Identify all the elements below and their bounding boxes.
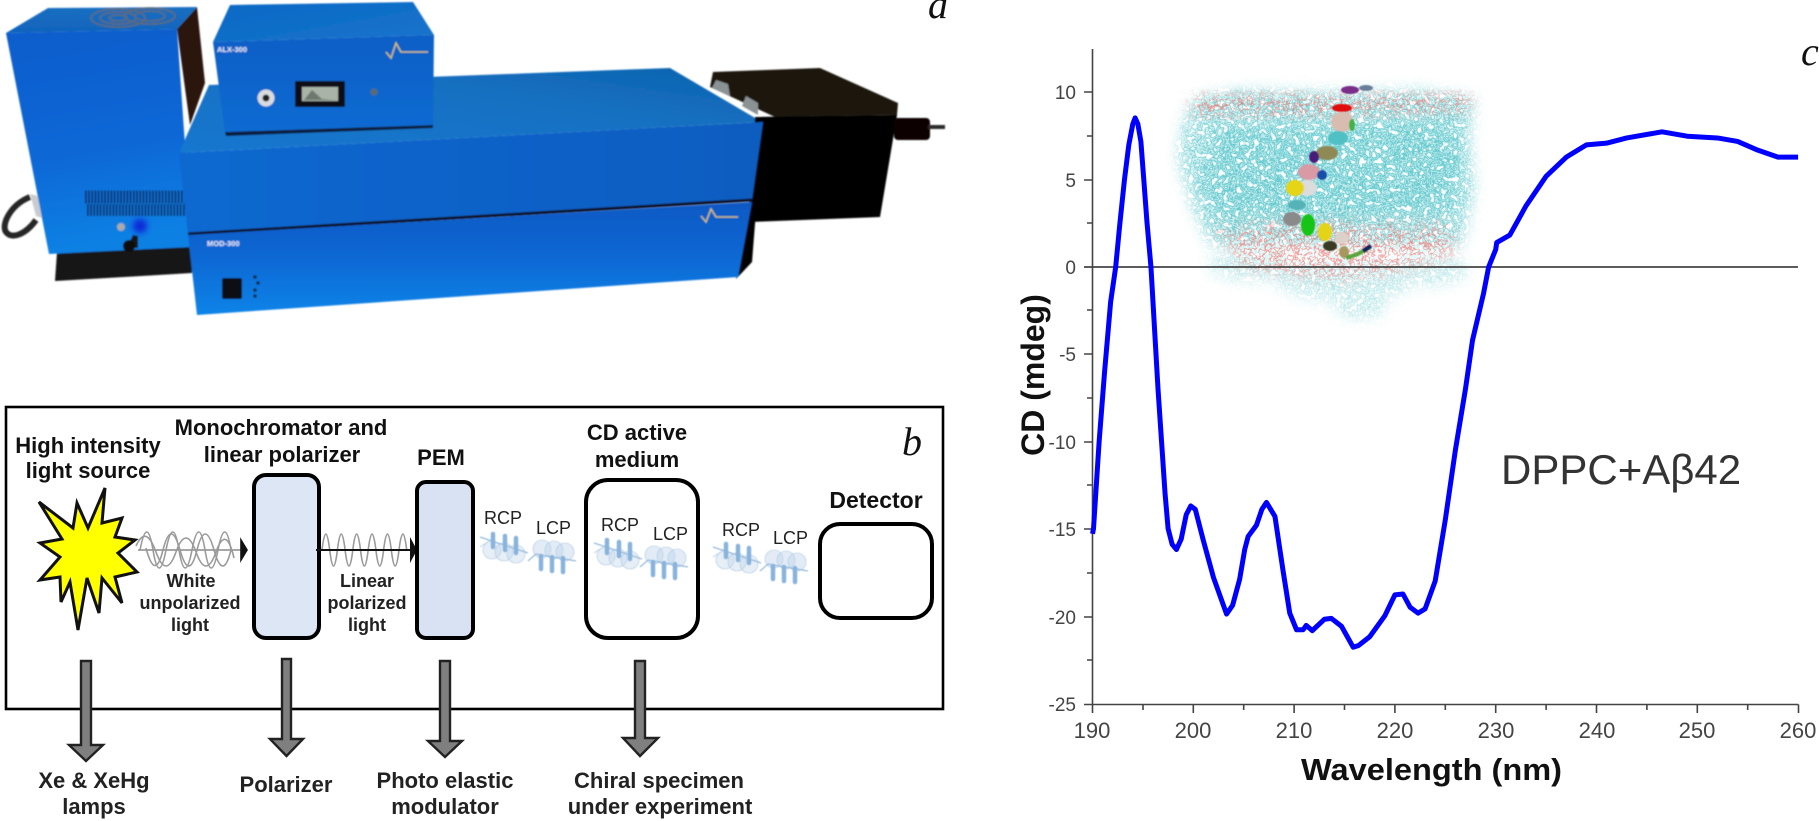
label: chiral specimen: under experiment xyxy=(568,794,753,819)
lamp housing front xyxy=(6,29,192,254)
lipid core strands xyxy=(1196,117,1468,227)
x tick labels: 190 xyxy=(1074,718,1110,743)
y tick labels: -25 xyxy=(1049,695,1076,716)
box: CD active medium xyxy=(586,480,698,638)
panel a: photograph of the CD spectrometer xyxy=(5,2,945,315)
x tick labels: 230 xyxy=(1478,718,1514,743)
arrow: PEM to modulator xyxy=(428,661,462,757)
heading: monochromator: Monochromator and xyxy=(175,415,387,440)
module label: MOD-300 xyxy=(207,239,240,248)
y tick labels: 0 xyxy=(1065,258,1076,279)
icon: RCP beam 1 xyxy=(480,534,528,563)
linear polarized light wave xyxy=(316,534,417,566)
x axis title: Wavelength (nm) xyxy=(1301,752,1562,787)
analyser display xyxy=(295,81,345,107)
box: polarizer xyxy=(254,475,319,638)
analyser box top xyxy=(213,2,434,42)
panel b letter: b xyxy=(902,419,922,464)
label: linear polarized light: Linear xyxy=(340,571,394,591)
icon: LCP beam 2 xyxy=(640,546,688,578)
lipid outer strands xyxy=(1170,80,1483,326)
main box top xyxy=(179,68,762,153)
detector snout xyxy=(894,118,945,140)
heading: CD active medium: CD active xyxy=(587,420,687,445)
box: PEM xyxy=(417,482,473,638)
y tick labels: -10 xyxy=(1049,433,1076,454)
white unpolarized light wave xyxy=(136,532,247,568)
label: photo elastic modulator: Photo elastic xyxy=(377,768,513,793)
x tick labels: 220 xyxy=(1377,718,1413,743)
x tick labels: 210 xyxy=(1276,718,1312,743)
icon: RCP beam 3 xyxy=(713,544,761,573)
main box upper front xyxy=(179,122,763,234)
x tick labels xyxy=(1074,718,1816,743)
lamp housing top xyxy=(6,7,197,33)
analyser box shadow xyxy=(225,125,433,136)
arrow: monochromator to polarizer xyxy=(270,659,303,756)
heading: light source: High intensity xyxy=(15,433,161,458)
label: photo elastic modulator: modulator xyxy=(391,794,499,819)
icon: power cable xyxy=(5,194,42,236)
x axis with ticks xyxy=(1092,704,1798,713)
x tick labels: 250 xyxy=(1679,718,1715,743)
y tick labels: 10 xyxy=(1055,83,1076,104)
label: Xe and XeHg lamps: Xe & XeHg xyxy=(38,768,150,793)
label: LCP 2: LCP xyxy=(653,524,688,544)
detector top xyxy=(710,68,898,117)
main box lower front xyxy=(188,202,752,315)
y tick labels: -15 xyxy=(1049,520,1076,541)
icon: LCP beam 1 xyxy=(528,540,576,572)
panel c: CD spectrum chart xyxy=(1015,49,1816,787)
label: linear polarized light: polarized xyxy=(327,593,407,613)
icon: analyser logo xyxy=(386,43,428,58)
heading: light source: light source xyxy=(26,458,150,483)
icon: LCP beam 3 xyxy=(760,550,808,582)
zero line xyxy=(1084,266,1798,268)
heading: PEM: PEM xyxy=(417,445,465,470)
y tick labels: -20 xyxy=(1049,608,1076,629)
x tick labels: 240 xyxy=(1579,718,1615,743)
power switch xyxy=(222,278,242,299)
x tick labels: 260 xyxy=(1780,718,1816,743)
y tick labels: 5 xyxy=(1065,171,1076,192)
icon: starburst light source xyxy=(39,488,137,630)
inset: lipid bilayer molecular model xyxy=(1170,80,1483,326)
label: Xe and XeHg lamps: lamps xyxy=(62,794,126,819)
x tick labels: 200 xyxy=(1175,718,1211,743)
analyser knob xyxy=(258,90,274,106)
helix peptide xyxy=(1283,85,1373,258)
analyser switch xyxy=(370,88,378,96)
control knob and latch xyxy=(117,219,147,252)
heading: detector: Detector xyxy=(829,487,923,513)
analyser label: ALX-300 xyxy=(217,45,247,54)
label: RCP 1: RCP xyxy=(484,508,522,528)
ventilation slots xyxy=(85,197,185,210)
detector front xyxy=(750,115,897,222)
panel b: optical layout frame xyxy=(6,407,943,709)
label: polarizer: Polarizer xyxy=(240,772,333,797)
heading: monochromator: linear polarizer xyxy=(204,442,361,467)
lamp housing side xyxy=(177,7,205,125)
main box right edge xyxy=(736,122,763,279)
label: white unpolarized light: light xyxy=(171,615,209,635)
CD spectrum curve xyxy=(1092,118,1798,647)
box: detector xyxy=(820,524,932,618)
y tick labels xyxy=(1049,83,1076,716)
icon: cooling fan xyxy=(91,8,175,27)
label: linear polarized light: light xyxy=(348,615,386,635)
headgroups top xyxy=(1182,90,1479,120)
y axis with ticks xyxy=(1084,49,1092,705)
label: white unpolarized light: unpolarized xyxy=(139,593,241,613)
y tick labels: -5 xyxy=(1059,345,1076,366)
icon: module logo xyxy=(701,209,738,222)
main box seam xyxy=(188,200,752,234)
sample annotation: DPPC+Aβ42 xyxy=(1501,446,1741,493)
label: chiral specimen: Chiral specimen xyxy=(574,768,744,793)
detector latches xyxy=(712,80,758,115)
icon: RCP beam 2 xyxy=(594,540,642,569)
headgroups bottom xyxy=(1212,213,1462,288)
arrow: CD medium to specimen xyxy=(623,661,658,756)
analyser box front xyxy=(213,35,434,132)
label: RCP 2: RCP xyxy=(601,515,639,535)
label: RCP 3: RCP xyxy=(722,520,760,540)
lamp housing base xyxy=(55,246,192,281)
label: white unpolarized light: White xyxy=(166,571,216,591)
label: LCP 3: LCP xyxy=(773,528,808,548)
y axis title: CD (mdeg) xyxy=(1015,294,1051,456)
status LEDs xyxy=(253,275,260,298)
heading: CD active medium: medium xyxy=(595,447,679,472)
panel c letter: c xyxy=(1801,29,1819,74)
label: LCP 1: LCP xyxy=(536,518,571,538)
arrow: light source to lamps xyxy=(69,661,103,761)
